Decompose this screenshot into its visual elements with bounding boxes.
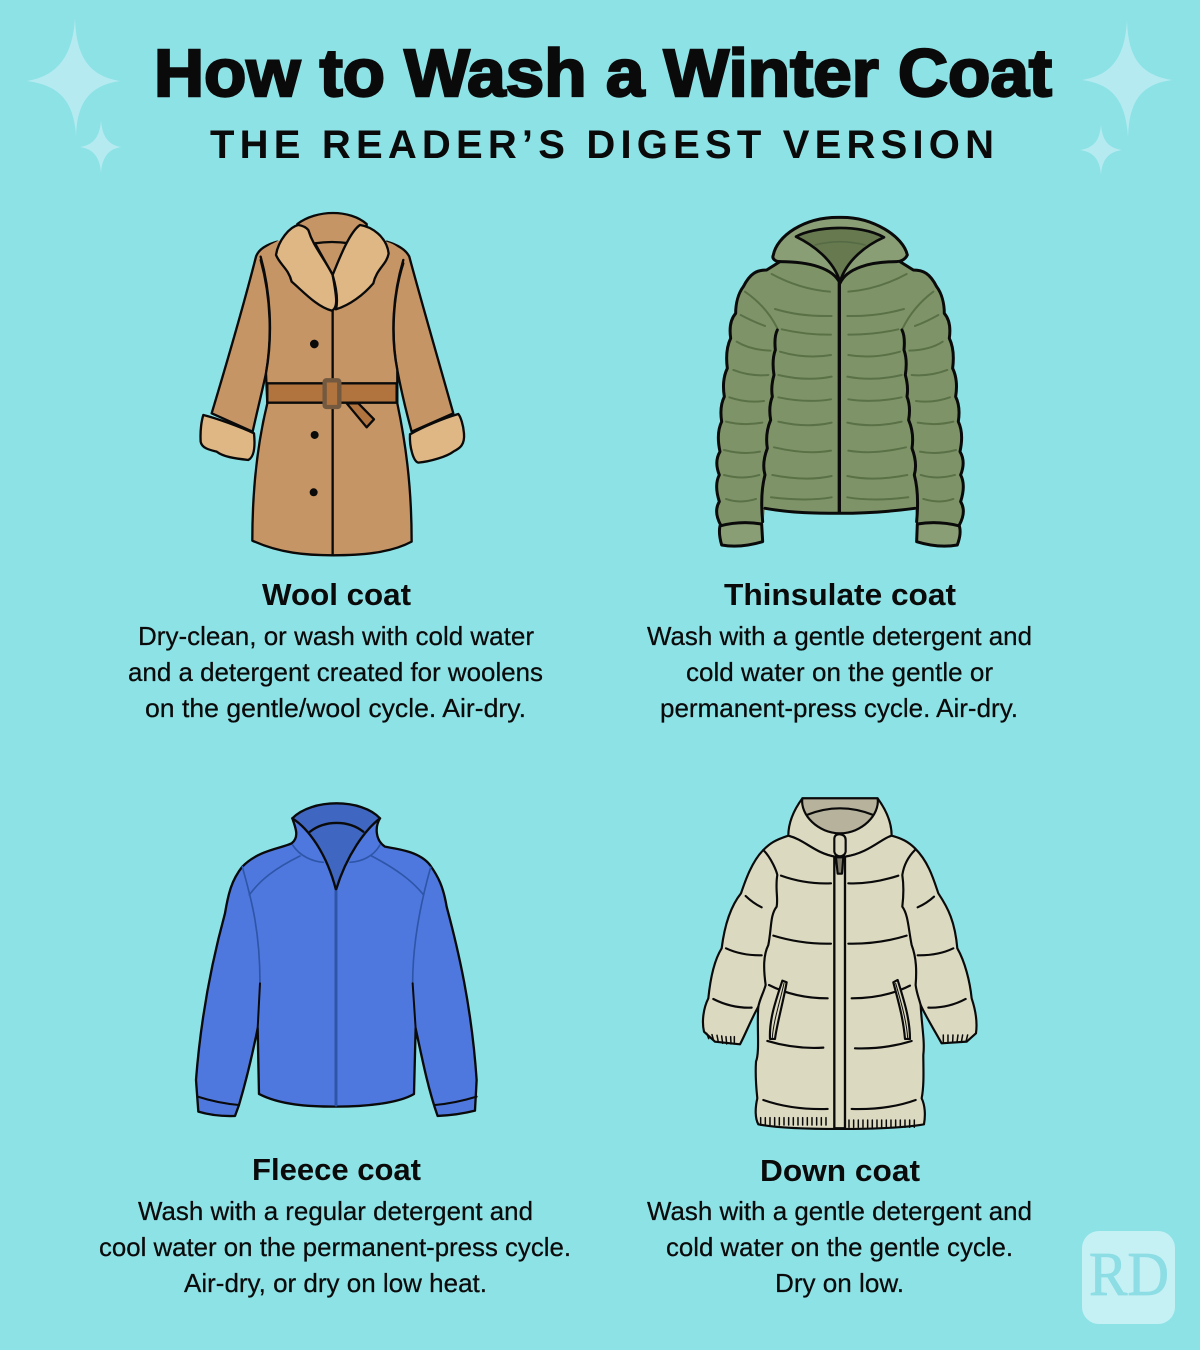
text: wool coat instructions: on the gentle/wool cycle. Air-dry.	[145, 693, 526, 723]
illustration: wool coat	[201, 213, 464, 555]
illustration: fleece coat	[196, 803, 477, 1116]
text: wool coat instructions: Dry-clean, or wash with cold water	[138, 621, 534, 651]
logo: RD badge: RD	[1089, 1241, 1169, 1309]
title: How to Wash a Winter Coat	[154, 36, 1052, 111]
logo: RD badge	[1082, 1231, 1175, 1324]
text: down coat instructions: cold water on the gentle cycle.	[666, 1232, 1013, 1262]
heading: down coat: Down coat	[760, 1153, 920, 1188]
text: down coat instructions: Wash with a gentle detergent and	[647, 1196, 1032, 1226]
heading: fleece coat: Fleece coat	[252, 1152, 421, 1187]
heading: thinsulate coat: Thinsulate coat	[724, 577, 956, 612]
illustration: thinsulate coat	[717, 217, 963, 546]
text: thinsulate coat instructions: cold water on the gentle or	[686, 657, 993, 687]
text: down coat instructions: Dry on low.	[775, 1268, 904, 1298]
text: fleece coat instructions: cool water on the permanent-press cycle.	[99, 1232, 571, 1262]
text: thinsulate coat instructions	[647, 621, 1032, 723]
icon: sparkles left	[27, 18, 121, 173]
text: wool coat instructions	[128, 621, 543, 723]
text: down coat instructions	[647, 1196, 1032, 1298]
subtitle: THE READER’S DIGEST VERSION	[210, 123, 994, 167]
text: fleece coat instructions: Wash with a regular detergent and	[138, 1196, 533, 1226]
text: wool coat instructions: and a detergent created for woolens	[128, 657, 543, 687]
text: thinsulate coat instructions: Wash with a gentle detergent and	[647, 621, 1032, 651]
text: fleece coat instructions	[99, 1196, 571, 1298]
heading: wool coat: Wool coat	[262, 577, 411, 612]
icon: sparkles right	[1080, 20, 1172, 175]
text: thinsulate coat instructions: permanent-press cycle. Air-dry.	[660, 693, 1018, 723]
illustration: down coat	[703, 798, 976, 1129]
text: fleece coat instructions: Air-dry, or dry on low heat.	[184, 1268, 487, 1298]
